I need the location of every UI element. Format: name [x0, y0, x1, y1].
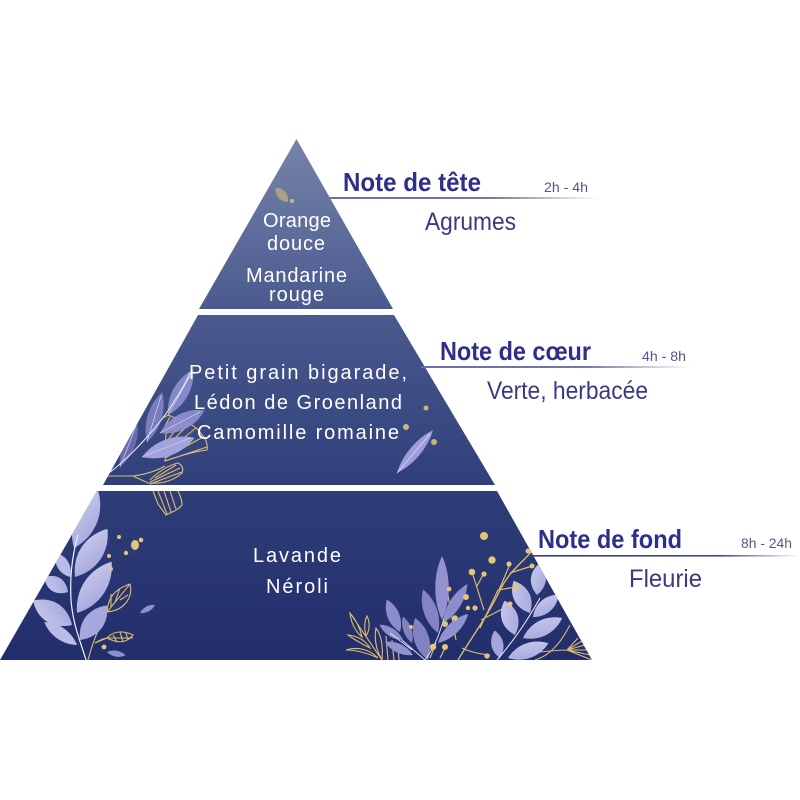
label: note de tête [329, 167, 600, 236]
ingredients: heart note: Camomille romaine [197, 422, 399, 444]
label: note de fond: Fleurie [629, 565, 702, 593]
ingredients: top note [246, 210, 347, 306]
ingredients: heart note: Lédon de Groenland [194, 392, 402, 414]
ingredients: top note: rouge [269, 284, 324, 306]
pyramid infographic [0, 139, 796, 660]
foliage: base right sprigs [346, 532, 592, 665]
ingredients: top note: Orange [263, 210, 331, 232]
ingredients: top note: Mandarine [246, 265, 347, 287]
label: note de cœur [421, 336, 692, 405]
foliage: heart left sprig [105, 366, 208, 484]
label: note de fond: Note de fond [538, 524, 682, 554]
foliage: base left sprig [27, 487, 182, 660]
label: note de tête: 2h - 4h [544, 179, 588, 195]
label: note de fond: 8h - 24h [741, 535, 792, 551]
ingredients: base note [253, 545, 341, 598]
ingredients: heart note: Petit grain bigarade, [189, 362, 407, 384]
ingredients: base note: Néroli [266, 576, 328, 598]
tier: top note [199, 139, 393, 309]
ingredients: heart note [189, 362, 407, 444]
icon: small leaf [272, 185, 294, 205]
ingredients: top note: douce [267, 233, 325, 255]
label: note de tête: Agrumes [425, 208, 516, 236]
label: note de cœur: 4h - 8h [642, 348, 686, 364]
foliage: heart right leaf and dots [393, 406, 437, 477]
label: note de cœur: Note de cœur [440, 336, 591, 366]
label: note de tête: Note de tête [343, 167, 481, 197]
tier: heart note [103, 315, 495, 485]
tier: base note [0, 487, 592, 665]
label: note de fond [531, 524, 800, 593]
label: note de cœur: Verte, herbacée [487, 377, 648, 405]
ingredients: base note: Lavande [253, 545, 341, 567]
